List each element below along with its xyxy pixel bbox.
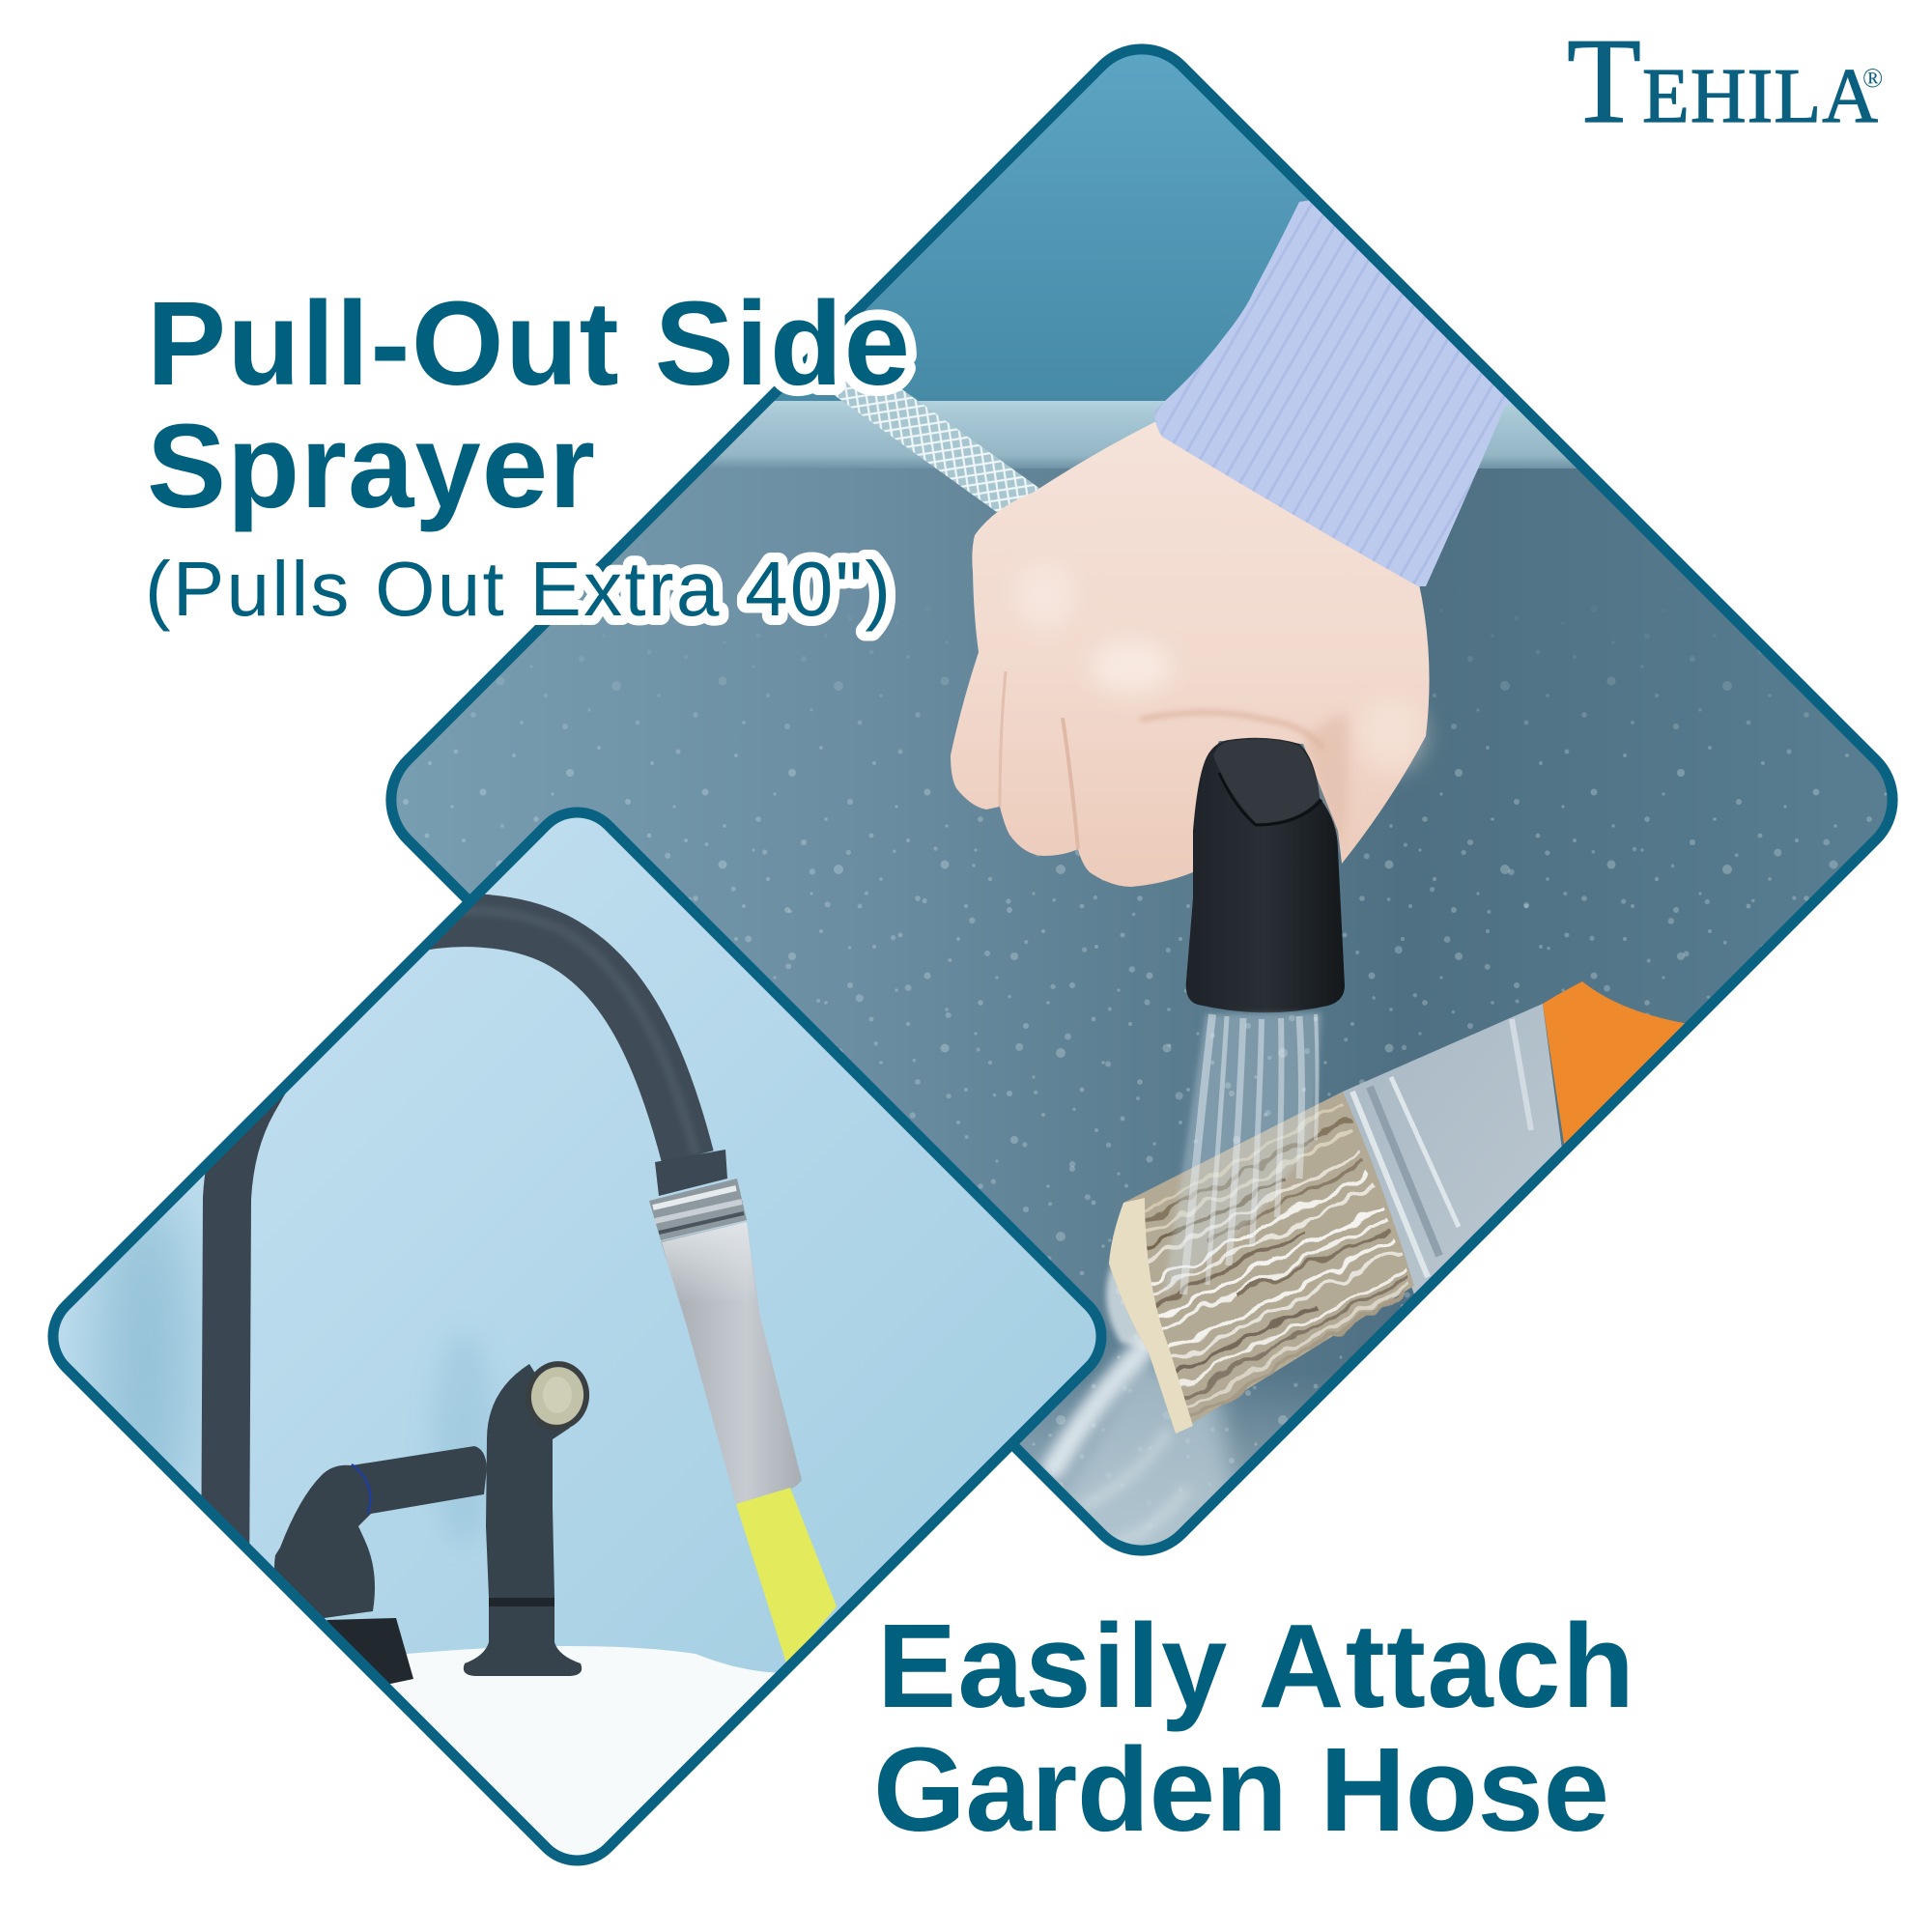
side sprayer bbox=[464, 1356, 595, 1676]
sprayer nozzle face bbox=[520, 1356, 595, 1435]
grey hose adapter bbox=[661, 1221, 802, 1504]
heading: pull-out side sprayer: (Pulls Out Extra 40") bbox=[145, 546, 891, 632]
splash at bottom corner bbox=[1037, 1262, 1239, 1546]
heading: pull-out side sprayer bbox=[145, 278, 910, 632]
water stream from sprayer bbox=[1164, 1012, 1321, 1294]
metal ferrule bbox=[1343, 1004, 1562, 1294]
sweater sleeve bbox=[1154, 201, 1512, 586]
orange handle bbox=[1543, 981, 1685, 1144]
small diamond border bbox=[35, 794, 1120, 1879]
heading: pull-out side sprayer: (Pulls Out Extra 40") bbox=[145, 546, 891, 632]
heading: easily attach garden hose bbox=[873, 1601, 1634, 1857]
yellow garden hose bbox=[736, 1488, 837, 1666]
gooseneck spout bbox=[406, 911, 696, 1157]
sink basin background bbox=[396, 469, 1888, 1546]
denser droplets in lower basin bbox=[665, 838, 1830, 1488]
sprayer head bbox=[1186, 738, 1345, 1012]
sink rim bbox=[710, 401, 1577, 469]
bristles bbox=[1109, 1092, 1414, 1434]
rear faucet pipe bbox=[225, 1063, 275, 1604]
white countertop bbox=[386, 1646, 787, 1893]
hand bbox=[951, 422, 1430, 887]
silver hose coupling bbox=[649, 1179, 747, 1240]
heading: easily attach garden hose: Easily Attach bbox=[877, 1601, 1634, 1733]
sprayer wall shadow bbox=[433, 1340, 493, 1537]
panel: small diamond photo of faucet with garden hose attached bbox=[35, 794, 1121, 1893]
logo: Tehila: ® bbox=[1862, 64, 1883, 94]
heading: easily attach garden hose: Garden Hose bbox=[873, 1724, 1609, 1857]
wall background bbox=[58, 817, 1095, 1673]
heading: pull-out side sprayer: Sprayer bbox=[147, 401, 595, 533]
heading: pull-out side sprayer: Pull-Out Side bbox=[147, 278, 910, 411]
upper wall background bbox=[775, 54, 1309, 401]
sprayer button bbox=[1213, 739, 1320, 823]
large diamond border bbox=[368, 26, 1916, 1574]
knuckle highlights and creases bbox=[1091, 639, 1172, 694]
heading: pull-out side sprayer: Pull-Out Side bbox=[147, 278, 910, 411]
faucet lever handle bbox=[274, 1446, 487, 1686]
paint brush bbox=[1109, 981, 1700, 1434]
logo: Tehila: TEHILA bbox=[1567, 14, 1878, 149]
braided hose bbox=[835, 380, 1039, 512]
spout collar bbox=[655, 1150, 727, 1196]
panel: large diamond photo of hand using the side sprayer bbox=[385, 43, 1898, 1556]
darker wall area left of pipe bbox=[97, 1188, 193, 1517]
water droplets on basin bbox=[403, 620, 1888, 1463]
